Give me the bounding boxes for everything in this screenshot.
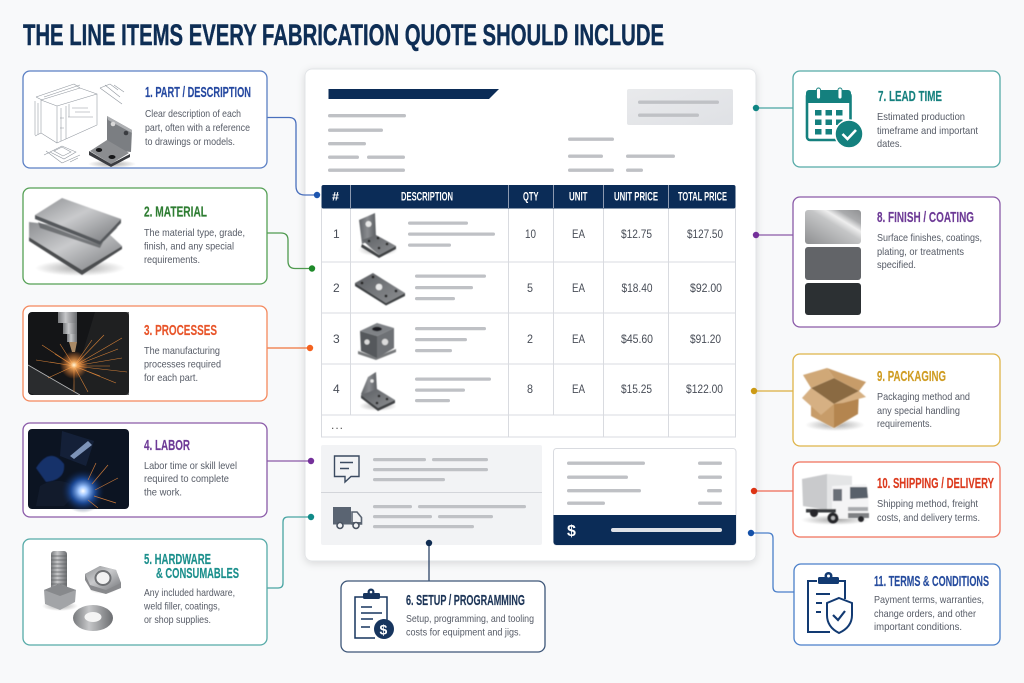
description: plating, or treatments: [877, 246, 964, 258]
table header row: DESCRIPTION: [401, 192, 453, 204]
icon: clipboard with dollar: $: [380, 622, 388, 638]
heading: [144, 551, 239, 582]
description: requirements.: [877, 418, 932, 430]
grand total bar: $: [567, 523, 576, 540]
heading: 5. HARDWARE: [144, 551, 211, 568]
description: Clear description of each: [145, 108, 241, 120]
table row 2: 2: [333, 281, 340, 295]
table row 4: 8: [527, 382, 533, 396]
description: Surface finishes, coatings,: [877, 232, 982, 244]
image: technical drawing and bracket: [35, 84, 136, 168]
panel: 3 processes: [23, 306, 267, 401]
description: Setup, programming, and tooling: [406, 613, 534, 625]
image: bolt nut washer: [42, 551, 121, 631]
description: to drawings or models.: [145, 136, 235, 148]
connector 11: [748, 530, 794, 592]
image: welder: [28, 429, 129, 513]
image: laser cutting sparks: [28, 312, 129, 395]
table header row: #: [332, 192, 340, 204]
quote number box: [627, 89, 733, 125]
description: Shipping method, freight: [877, 498, 978, 510]
table header row: QTY: [523, 192, 539, 204]
description: costs, and delivery terms.: [877, 512, 980, 524]
description: Estimated production: [877, 111, 965, 123]
heading: 3. PROCESSES: [144, 322, 217, 339]
description: the work.: [144, 486, 182, 498]
description lines: [415, 327, 486, 352]
image: cardboard box: [802, 368, 866, 431]
table row 2: 5: [527, 281, 533, 295]
table header row: UNIT: [569, 192, 588, 204]
description: [144, 345, 221, 384]
image: metal plates: [29, 198, 125, 276]
heading: 1. PART / DESCRIPTION: [145, 84, 251, 101]
heading: 4. LABOR: [144, 437, 190, 454]
description: timeframe and important: [877, 125, 978, 137]
description: or shop supplies.: [144, 614, 211, 626]
description: The material type, grade,: [144, 227, 245, 239]
panel: 9 packaging: [793, 354, 1000, 446]
table header row: TOTAL PRICE: [678, 192, 727, 204]
table row 1: $127.50: [687, 227, 723, 241]
part image: bracket: [358, 213, 398, 258]
heading: 9. PACKAGING: [877, 368, 946, 385]
description: finish, and any special: [144, 240, 234, 252]
table row 4: $122.00: [686, 382, 723, 396]
icon: delivery truck: [333, 507, 362, 528]
heading: 7. LEAD TIME: [878, 88, 942, 105]
table row 2: $92.00: [690, 281, 722, 295]
description: part, often with a reference: [145, 122, 250, 134]
quote detail placeholder lines: [568, 138, 675, 172]
description: [877, 391, 970, 430]
description: for each part.: [144, 372, 198, 384]
notes and shipping box: [321, 445, 542, 545]
description: [143, 587, 235, 626]
table row 1: 10: [525, 227, 536, 241]
description: [144, 227, 245, 266]
connector 5: [267, 514, 314, 588]
description: Payment terms, warranties,: [874, 594, 984, 606]
panel: 2 material: [23, 188, 267, 284]
table row 3: 2: [527, 332, 533, 346]
table header row: UNIT PRICE: [614, 192, 658, 204]
table grid: [322, 208, 736, 437]
description: processes required: [144, 358, 221, 370]
part image: flat plate: [355, 273, 405, 306]
subtotal placeholder lines: [567, 462, 722, 505]
document header bar: [328, 89, 499, 99]
panel: 5 hardware and consumables: [23, 539, 267, 645]
connector 6: [426, 540, 432, 581]
description: weld filler, coatings,: [143, 600, 220, 612]
connector 2: [267, 233, 315, 272]
table row 1: 1: [333, 227, 340, 241]
image: finish swatches: [805, 210, 861, 315]
image: box truck: [801, 474, 869, 525]
heading: 2. MATERIAL: [144, 204, 207, 220]
icon: clipboard with dollar: [355, 588, 394, 639]
table row 1: EA: [572, 227, 585, 241]
description: change orders, and other: [874, 608, 976, 620]
icon: calendar with check: [806, 88, 863, 148]
description: important conditions.: [874, 621, 962, 633]
panel: 10 shipping delivery: [793, 462, 1000, 537]
description: required to complete: [144, 473, 229, 485]
description: dates.: [877, 138, 902, 150]
table row 4: [333, 372, 723, 411]
table row 3: EA: [572, 332, 585, 346]
panel: 6 setup programming: [341, 581, 545, 652]
table row 2: EA: [572, 281, 585, 295]
connector 9: [751, 388, 793, 394]
panel: 7 lead time: [793, 71, 1000, 167]
table row 3: [333, 323, 721, 360]
description: [144, 460, 237, 498]
description: costs for equipment and jigs.: [406, 626, 521, 638]
icon: clipboard with shield: [808, 572, 852, 633]
description: [145, 108, 250, 148]
description lines: [415, 274, 486, 300]
part image: angle bracket: [359, 372, 397, 411]
table row 4: EA: [572, 382, 585, 396]
description: requirements.: [144, 254, 200, 266]
description: Labor time or skill level: [144, 460, 237, 472]
panel: 8 finish coating: [793, 197, 1000, 327]
description: The manufacturing: [144, 345, 220, 357]
panel: 11 terms and conditions: [794, 564, 1000, 645]
description: specified.: [877, 259, 916, 271]
table row 2: [333, 273, 722, 306]
connector 3: [267, 345, 313, 351]
totals box: [554, 448, 736, 545]
table header row: [322, 185, 736, 208]
line items table: [322, 185, 736, 437]
description: any special handling: [877, 405, 960, 417]
panel: 4 labor: [23, 423, 267, 517]
table row 1: $12.75: [621, 227, 652, 241]
part image: box fitting: [357, 323, 397, 360]
table row 3: 3: [333, 332, 340, 346]
description: [877, 111, 978, 150]
connector 4: [267, 458, 314, 464]
title: THE LINE ITEMS EVERY FABRICATION QUOTE SHOULD INCLUDE: [23, 19, 664, 52]
table row 1: [333, 213, 723, 258]
heading: & CONSUMABLES: [156, 565, 239, 582]
panel: quote document: [305, 69, 756, 561]
description: [877, 232, 982, 271]
description lines: [408, 222, 495, 247]
description: [406, 613, 534, 638]
table row 2: $18.40: [622, 281, 653, 295]
connector 1: [267, 118, 320, 198]
company info placeholder lines: [328, 114, 406, 172]
table row 4: $15.25: [621, 382, 652, 396]
description: Any included hardware,: [144, 587, 235, 599]
connector 8: [753, 232, 793, 238]
heading: 8. FINISH / COATING: [877, 209, 974, 226]
description: [874, 594, 984, 633]
panel: 1 part description: [23, 71, 267, 168]
table row 3: $45.60: [621, 332, 653, 346]
grand total bar: [554, 515, 736, 545]
connector 10: [751, 488, 793, 494]
table continuation ellipsis: ...: [331, 418, 343, 432]
table row 3: $91.20: [690, 332, 721, 346]
description: [877, 498, 980, 524]
heading: 6. SETUP / PROGRAMMING: [406, 592, 525, 609]
description: Packaging method and: [877, 391, 970, 403]
table row 4: 4: [333, 382, 340, 396]
note placeholder lines: [373, 458, 526, 528]
connector 7: [753, 105, 793, 111]
description lines: [415, 378, 491, 402]
icon: speech bubble: [334, 456, 359, 482]
